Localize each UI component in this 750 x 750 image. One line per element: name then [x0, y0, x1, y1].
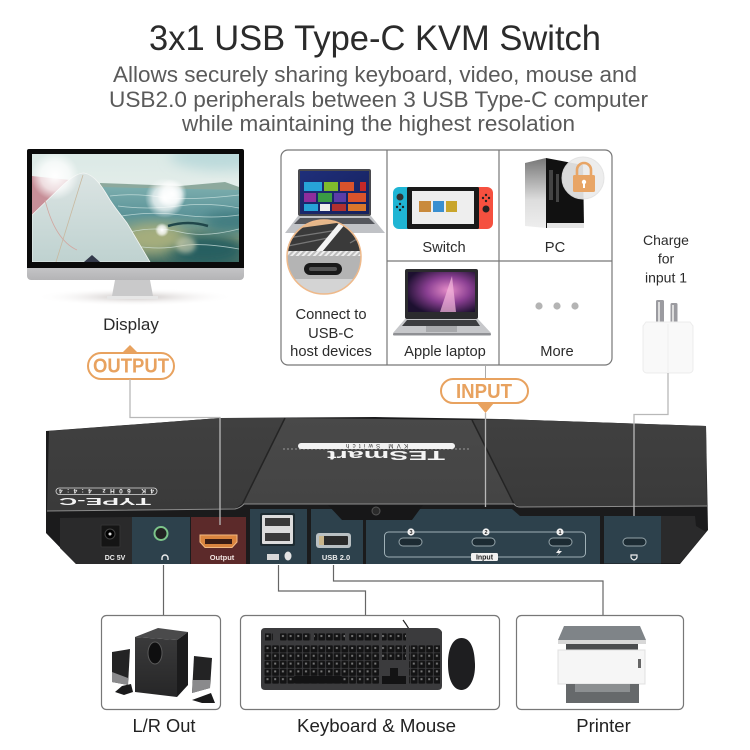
port: usb 2.0 [311, 509, 363, 564]
device front: screw notch [328, 505, 423, 520]
icon: locked desktop pc [525, 157, 604, 228]
input badge [441, 365, 528, 413]
icon: more dots [535, 302, 579, 310]
label: connect to usb-c host devices: USB-C [308, 326, 354, 342]
label: connect to usb-c host devices [290, 307, 372, 360]
label: connect to usb-c host devices: host devices [290, 344, 372, 360]
connector: printer line [334, 565, 603, 616]
device lid: left panel [47, 418, 285, 511]
panel: speakers [102, 616, 220, 710]
device lid: centre panel: KVM Switch [346, 442, 408, 448]
port: usb keyboard and mouse [250, 509, 307, 564]
label: connect to usb-c host devices: Connect to [295, 307, 367, 323]
label: keyboard and mouse: Keyboard & Mouse [297, 715, 456, 736]
port: dc 5v [60, 517, 132, 564]
model text: TYPE-C [59, 495, 151, 506]
icon: apple laptop [393, 269, 491, 336]
label: charge for input 1 [643, 232, 689, 286]
connector: input line [484, 413, 486, 507]
label: more: More [540, 344, 574, 360]
icon: charger [643, 300, 693, 373]
output badge: OUTPUT [93, 354, 169, 378]
subtitle: USB2.0 peripherals between 3 USB Type-C computer [109, 87, 649, 112]
label: charge for input 1: input 1 [645, 270, 687, 286]
device lid: centre panel: TESmart [326, 448, 445, 463]
connector: keyboard line [278, 565, 366, 616]
connector: output line [130, 379, 220, 525]
icon: mouse [448, 638, 475, 690]
output badge [88, 345, 174, 379]
device front: right end [661, 516, 706, 563]
icon: printer [558, 626, 646, 703]
subtitle: while maintaining the highest resolation [181, 111, 575, 136]
label: display: Display [103, 315, 159, 334]
label: charge for input 1: for [658, 250, 675, 266]
icon: usb-c laptop with zoom circle [285, 169, 385, 296]
port group: usb-c inputs: Input [476, 554, 494, 562]
subtitle: Allows securely sharing keyboard, video, mouse and [113, 62, 637, 87]
port group: usb-c inputs: 3 [409, 530, 413, 536]
kvm switch device [46, 417, 708, 564]
port: dc 5v: DC 5V [105, 555, 126, 562]
panel: input host devices [281, 150, 612, 365]
label: l/r out: L/R Out [132, 715, 196, 736]
label: charge for input 1: Charge [643, 232, 689, 248]
model text: 4K 60Hz 4:4:4 [59, 487, 154, 494]
title: 3x1 USB Type-C KVM Switch [149, 18, 601, 58]
label: apple laptop: Apple laptop [404, 344, 486, 360]
port group: usb-c inputs: 2 [484, 530, 488, 536]
port: usb-c charge [604, 516, 661, 564]
port: hdmi output: Output [210, 553, 235, 562]
device lid: right panel [472, 419, 707, 507]
panel: keyboard and mouse [240, 616, 500, 710]
icon: keyboard [261, 620, 475, 690]
label: switch: Switch [422, 240, 466, 256]
port: hdmi output [191, 517, 246, 564]
label: printer: Printer [576, 715, 631, 736]
input badge: INPUT [456, 381, 512, 403]
icon: game console [393, 187, 493, 229]
model text [56, 487, 157, 506]
icon: display monitor [27, 149, 244, 303]
subtitle [109, 62, 649, 136]
device lid: centre panel [243, 418, 514, 504]
panel: printer [516, 616, 684, 710]
port group: usb-c inputs [366, 509, 600, 564]
icon: speakers [112, 628, 215, 703]
label: pc: PC [545, 240, 566, 256]
port: audio [132, 517, 190, 564]
port: usb 2.0: USB 2.0 [322, 553, 350, 562]
connector: audio line [162, 565, 164, 616]
connector: charge line [634, 373, 668, 516]
port group: usb-c inputs: 1 [558, 530, 562, 536]
